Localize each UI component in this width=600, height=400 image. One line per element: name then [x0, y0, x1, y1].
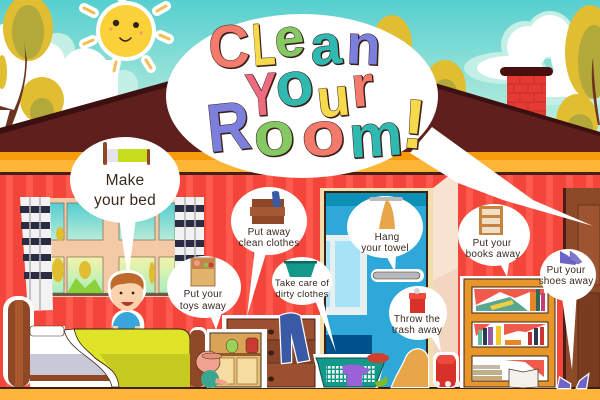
icon: basket: [284, 261, 317, 277]
icon: bed: [103, 142, 150, 165]
trash can: [433, 352, 461, 388]
speech bubble: clothes: [231, 187, 307, 316]
icon: trash bin: [409, 288, 426, 313]
clouds left: [0, 22, 138, 135]
title text: [203, 7, 429, 171]
roof: [0, 44, 600, 153]
speech bubble: toys: toys away: [180, 301, 226, 312]
title text: o: [271, 48, 318, 121]
text: put your books away: Put your: [473, 238, 512, 249]
text: put your shoes away: Put your: [547, 265, 586, 276]
tree: left: [0, 0, 64, 128]
title text: !: [399, 84, 429, 164]
icon: towel: [369, 197, 403, 229]
speech bubble: make your bed: [70, 137, 180, 272]
clouds right: [464, 11, 600, 105]
tree: behind roof: [372, 15, 466, 116]
text: hang your towel: Hang: [375, 232, 399, 243]
sun: [84, 0, 169, 71]
title text: m: [347, 100, 405, 171]
bathroom doorway: [320, 177, 458, 388]
curtain right: [175, 197, 204, 268]
icon: sneakers: [560, 251, 582, 265]
speech bubble: toys: [167, 256, 241, 330]
text: throw the trash away: Throw the: [394, 314, 440, 325]
bed: [3, 296, 207, 387]
title text: R: [203, 87, 254, 167]
speech bubble: trash: trash away: [392, 325, 442, 336]
curtain left: [20, 197, 53, 311]
icon: book shelf: [479, 206, 503, 235]
title text: r: [348, 53, 376, 120]
floor shoes: [558, 375, 588, 388]
boy: [108, 270, 146, 332]
eave: [0, 152, 600, 175]
door: [458, 175, 600, 388]
towel pile: [392, 349, 428, 387]
title text: o: [298, 98, 348, 171]
title text: Y: [243, 60, 280, 129]
speech bubble: books: books away: [466, 249, 520, 260]
towel rail: [371, 269, 424, 282]
title text: o: [250, 97, 298, 171]
speech bubble: shoes: [539, 249, 596, 370]
title text: C: [207, 13, 251, 81]
wall: [0, 175, 600, 388]
window: [47, 198, 177, 297]
title text: a: [308, 12, 344, 77]
speech bubble: books: [458, 204, 530, 277]
text: put your toys away: Put your: [184, 289, 223, 300]
title text: u: [314, 67, 353, 130]
title speech bubble: [166, 7, 593, 226]
chimney: [500, 67, 553, 119]
toy shelf: [207, 329, 267, 388]
speech bubble: clothes: clean clothes: [239, 238, 299, 249]
speech bubble: make your bed: your bed: [94, 192, 156, 209]
bookcase: [460, 276, 557, 388]
dresser: [222, 315, 320, 388]
speech bubble: dirty clothes: dirty clothes: [275, 289, 329, 300]
title text: L: [250, 10, 277, 79]
laundry basket: [313, 353, 389, 388]
speech bubble: towel: [347, 196, 423, 272]
speech bubble: shoes: shoes away: [539, 276, 593, 287]
bunny toy: [196, 351, 228, 388]
speech bubble: dirty clothes: [272, 257, 336, 352]
title text: n: [345, 12, 382, 77]
speech bubble: towel: your towel: [361, 243, 409, 254]
tree: right: [556, 5, 600, 150]
title text: e: [271, 7, 307, 70]
speech bubble: trash: [389, 286, 447, 352]
text: make your bed: Make: [106, 172, 144, 189]
sky background: [0, 0, 600, 140]
icon: toy shelf: [191, 258, 215, 286]
text: take care of dirty clothes: Take care of: [275, 278, 329, 289]
jeans: [280, 314, 309, 363]
icon: clothes dresser: [250, 191, 285, 224]
text: put away clean clothes: Put away: [248, 227, 290, 238]
floor: [0, 387, 600, 400]
